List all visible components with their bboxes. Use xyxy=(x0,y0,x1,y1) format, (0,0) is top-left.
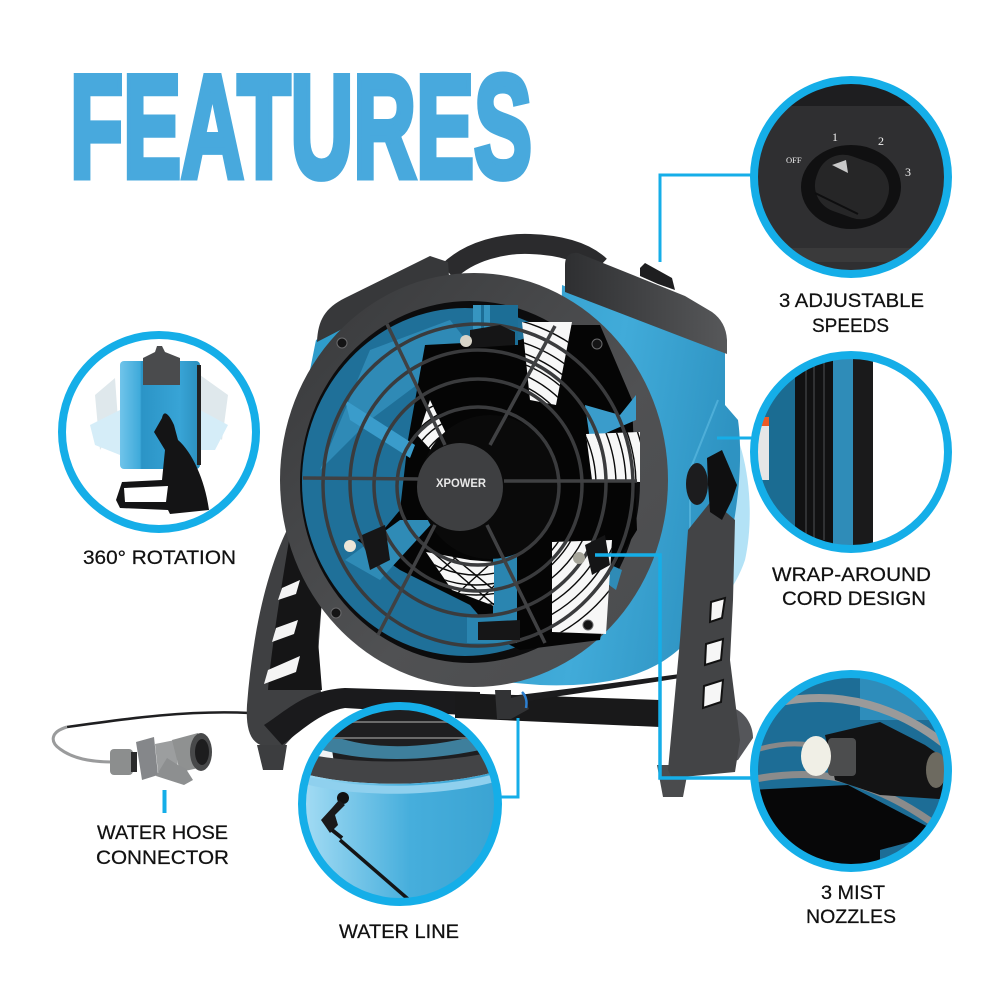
circle: speed knob: 2 xyxy=(878,134,884,148)
label: water hose connector: CONNECTOR xyxy=(96,847,229,869)
label: 3 adjustable speeds: 3 ADJUSTABLE xyxy=(779,290,924,312)
ring screws xyxy=(331,338,602,630)
label: wrap-around cord design: CORD DESIGN xyxy=(782,588,926,610)
fan body xyxy=(300,285,750,685)
circle: speed knob: OFF xyxy=(786,155,802,165)
label: water hose connector: WATER HOSE xyxy=(97,822,228,844)
circle: speed knob: 1 xyxy=(832,130,838,144)
label: 3 mist nozzles: NOZZLES xyxy=(806,906,896,928)
hub with logo: XPOWER xyxy=(436,478,487,490)
fan interior xyxy=(320,305,637,650)
infographic canvas xyxy=(52,72,952,938)
circle: water line xyxy=(298,702,502,910)
top housing left xyxy=(317,256,450,342)
right stand with knob xyxy=(668,450,740,778)
top housing right with switch xyxy=(565,253,727,354)
front ring xyxy=(280,273,668,687)
circle: cord wrap xyxy=(750,351,954,555)
circle: 360 rotation xyxy=(62,335,256,529)
label: water hose connector xyxy=(96,822,229,869)
grille xyxy=(303,324,637,646)
circle: speed knob: 3 xyxy=(905,165,911,179)
water hose with connector xyxy=(53,712,250,785)
circle: mist nozzle xyxy=(750,670,954,880)
motor xyxy=(420,415,560,559)
label: water line: WATER LINE xyxy=(339,921,459,943)
leader lines xyxy=(164,175,752,813)
base tube and feet xyxy=(257,674,753,797)
label: 3 adjustable speeds: SPEEDS xyxy=(812,315,889,337)
label: 360 rotation: 360° ROTATION xyxy=(83,547,236,569)
title: FEATURES xyxy=(70,45,532,208)
fan guard stripes seen through grille xyxy=(418,322,640,634)
label: 3 mist nozzles xyxy=(806,882,896,928)
hub with logo xyxy=(417,443,503,531)
mist nozzles in fan xyxy=(344,325,610,640)
label: 3 mist nozzles: 3 MIST xyxy=(821,882,885,904)
carry handle xyxy=(448,244,600,272)
label: wrap-around cord design xyxy=(772,564,931,610)
label: 3 adjustable speeds xyxy=(779,290,924,337)
circle: speed knob xyxy=(750,76,954,280)
label: wrap-around cord design: WRAP-AROUND xyxy=(772,564,931,586)
left stand xyxy=(247,520,322,747)
